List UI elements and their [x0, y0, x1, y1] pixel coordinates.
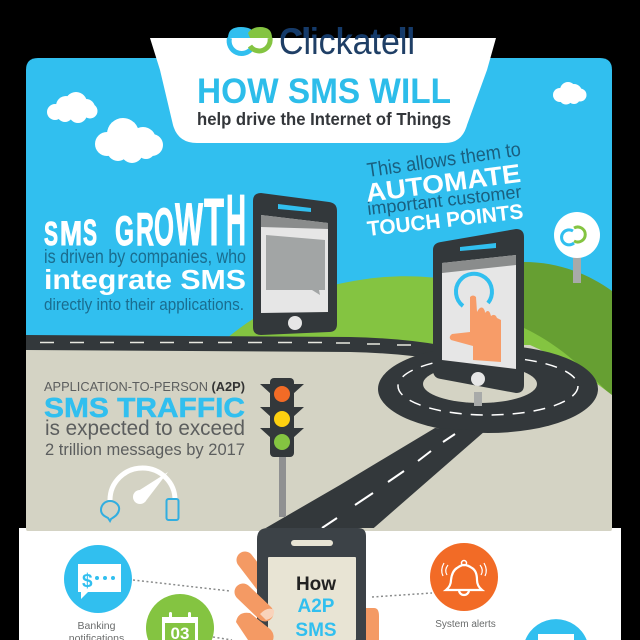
text block: automate — [364, 139, 525, 241]
label: system alerts: System alerts — [435, 619, 496, 630]
icon: calendar — [146, 594, 214, 640]
label: banking: Banking — [78, 620, 115, 632]
text block: A2P traffic: 2 trillion messages by 2017 — [45, 440, 245, 459]
hill: light green — [229, 276, 608, 392]
text block: SMS growth — [44, 181, 246, 314]
subtitle: help drive the Internet of Things — [197, 109, 451, 129]
text block: SMS growth: S — [83, 212, 97, 253]
hand: right side — [366, 608, 379, 640]
text block: SMS growth: T — [204, 185, 224, 260]
icon: alert bell — [430, 543, 498, 611]
road: roundabout — [378, 345, 598, 433]
text block: SMS growth: is driven by companies, who — [44, 247, 246, 268]
text block: SMS growth: O — [154, 198, 174, 257]
text block: SMS growth: S — [44, 215, 58, 252]
icon: banking: $ — [82, 571, 93, 592]
label: banking — [69, 620, 124, 640]
text block: automate: AUTOMATE — [364, 158, 522, 208]
text block: automate: important customer — [366, 182, 522, 219]
logo: Clickatell: Clickatell — [279, 21, 415, 62]
phone screen text: How — [296, 574, 336, 595]
logo: Clickatell — [226, 27, 413, 56]
ground — [26, 345, 612, 531]
logo: Clickatell: Clickatell — [279, 21, 415, 62]
connector lines — [133, 580, 432, 640]
icon: touch ring — [456, 274, 492, 306]
cloud: upper left — [47, 92, 98, 123]
phone: A2P: A2P — [298, 596, 335, 617]
text block: SMS growth: M — [60, 215, 82, 253]
phone: touch — [433, 229, 524, 393]
road: toward phone — [266, 428, 483, 528]
icon: banking — [64, 545, 132, 613]
cloud: upper right — [553, 82, 586, 104]
phone: A2P — [257, 528, 366, 640]
panel: A2P use cases — [19, 528, 621, 640]
cloud: center left — [95, 118, 163, 163]
text block: automate: TOUCH POINTS — [366, 200, 525, 241]
icon: hand — [450, 296, 501, 362]
hand: top finger behind phone — [245, 560, 268, 590]
text block: SMS growth: directly into their applications. — [44, 296, 244, 314]
banner: title shape — [150, 38, 496, 143]
text block: SMS growth: W — [175, 191, 203, 258]
icon: speed gauge — [101, 468, 178, 521]
text block: SMS growth: integrate SMS — [44, 264, 246, 295]
road: horizontal — [26, 335, 433, 356]
text: H — [226, 181, 246, 261]
panel: sky and road scene — [26, 58, 612, 540]
text block: A2P traffic: is expected to exceed — [45, 417, 245, 440]
sign: logo on post — [554, 212, 600, 283]
traffic light — [260, 378, 304, 517]
text block: A2P traffic: APPLICATION-TO-PERSON (A2P) — [44, 379, 245, 394]
title: HOW SMS WILL — [197, 72, 451, 111]
roundabout post — [474, 392, 482, 406]
phone: messaging — [253, 193, 337, 335]
icon: blue service circle — [525, 619, 587, 640]
text block: A2P traffic — [44, 379, 245, 459]
text block: A2P traffic: SMS TRAFFIC — [44, 392, 245, 423]
text block: SMS growth: G — [115, 207, 134, 254]
text block: automate: This allows them to — [366, 139, 522, 182]
hand: fingers over phone — [236, 592, 274, 640]
text block: SMS growth: R — [136, 203, 154, 255]
hill: dark green — [524, 262, 612, 396]
